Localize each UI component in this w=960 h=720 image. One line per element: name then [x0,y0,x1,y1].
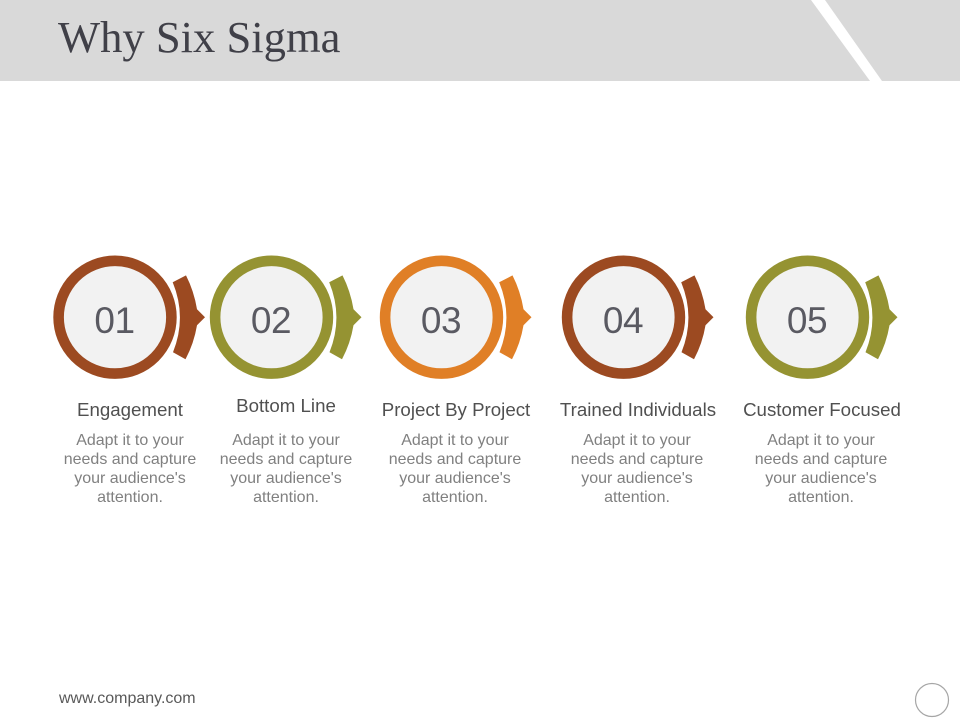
heading: Bottom Line: Bottom Line [236,395,336,416]
text: Bottom Line description: attention. [253,489,319,506]
text: Project By Project description: needs and capture [389,451,521,468]
title: Why Six Sigma [58,12,340,62]
heading: Customer Focused: Customer Focused [743,399,901,420]
page number circle [914,682,950,718]
text: Customer Focused description: attention. [788,489,854,506]
text: Project By Project description [389,432,521,506]
step 03 circle [385,261,532,374]
text: Project By Project description: your audience's [399,470,511,487]
text: Bottom Line description [220,432,352,506]
step 01 circle: 01 [94,300,135,341]
step 03 circle: 03 [421,300,461,341]
step 04 circle [567,261,714,374]
step 05 circle [751,261,898,374]
text: Trained Individuals description: needs and capture [571,451,703,468]
text: Trained Individuals description [571,432,703,506]
text: Customer Focused description: needs and capture [755,451,887,468]
text: Engagement description: needs and capture [64,451,196,468]
text: Trained Individuals description: Adapt it to your [583,432,691,449]
text: Engagement description: your audience's [74,470,186,487]
text: Customer Focused description: Adapt it to your [767,432,875,449]
heading: Trained Individuals: Trained Individuals [560,399,716,420]
text: Customer Focused description [755,432,887,506]
text: Trained Individuals description: attention. [604,489,670,506]
step 04 circle: 04 [603,300,643,341]
heading: Project By Project: Project By Project [382,399,530,420]
text: Engagement description [64,432,196,506]
text: Engagement description: attention. [97,489,163,506]
step 02 circle [215,261,362,374]
heading: Engagement: Engagement [77,399,183,420]
text: Project By Project description: Adapt it to your [401,432,509,449]
header band [0,0,960,81]
footer url: www.company.com [59,690,196,707]
text: Project By Project description: attention. [422,489,488,506]
step 05 circle: 05 [787,300,827,341]
text: Trained Individuals description: your audience's [581,470,693,487]
text: Bottom Line description: needs and capture [220,451,352,468]
text: Customer Focused description: your audience's [765,470,877,487]
text: Engagement description: Adapt it to your [76,432,184,449]
text: Bottom Line description: your audience's [230,470,342,487]
step 01 circle [59,261,205,374]
text: Bottom Line description: Adapt it to your [232,432,340,449]
step 02 circle: 02 [251,300,291,341]
